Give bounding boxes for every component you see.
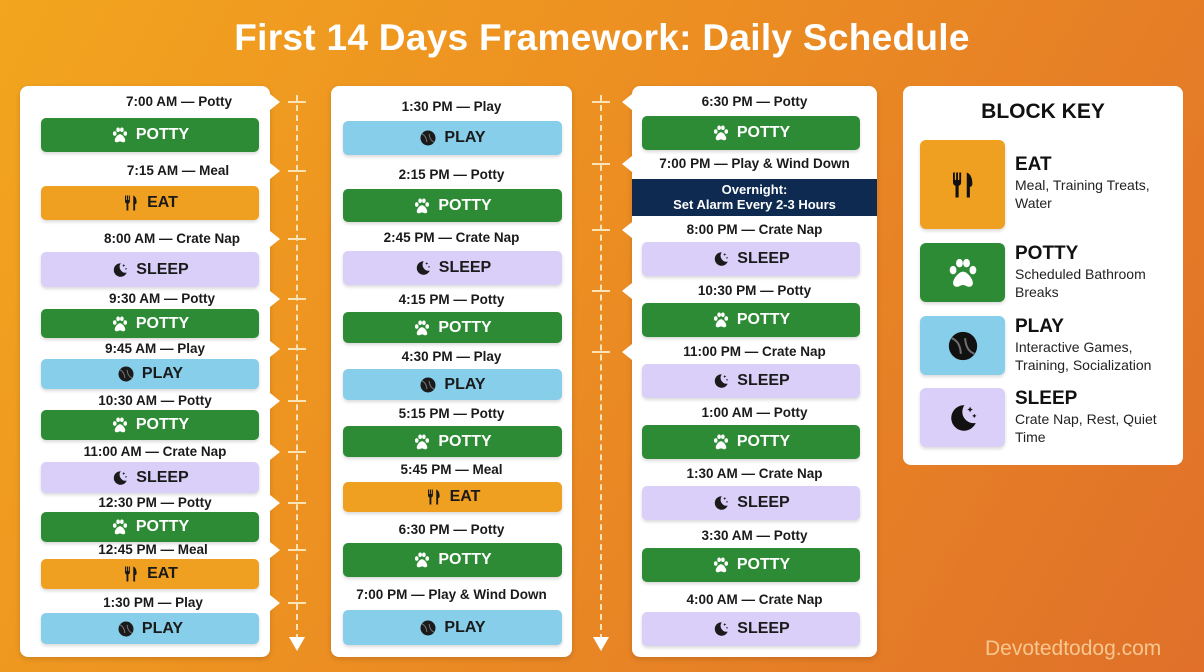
panel: column 3: POTTY <box>737 124 790 141</box>
panel: column 1: 9:30 AM — Potty <box>109 291 215 306</box>
panel: column 3: 1:30 AM — Crate Nap <box>686 466 823 481</box>
panel: column 2: 1:30 PM — Play <box>402 99 501 114</box>
panel: column 2: PLAY <box>444 376 486 392</box>
panel: block key: POTTY <box>1015 243 1078 264</box>
panel: column 2: 4:15 PM — Potty <box>399 292 504 307</box>
panel: block key: SLEEP <box>1015 388 1077 409</box>
panel: block key: Scheduled Bathroom <box>1015 266 1146 282</box>
panel: column 2: 4:30 PM — Play <box>402 349 501 364</box>
panel: column 2: 2:45 PM — Crate Nap <box>384 230 519 245</box>
panel: column 3: 4:00 AM — Crate Nap <box>686 592 823 607</box>
panel: column 3: 3:30 AM — Potty <box>701 528 808 543</box>
panel: block key: Water <box>1015 195 1052 211</box>
timeline 1 <box>288 95 306 651</box>
panel: block key: Meal, Training Treats, <box>1015 177 1150 193</box>
key: eat <box>920 140 1005 229</box>
panel: column 2: 5:45 PM — Meal <box>400 462 503 477</box>
panel: block key: Crate Nap, Rest, Quiet <box>1015 411 1157 427</box>
panel: column 2: 5:15 PM — Potty <box>399 406 504 421</box>
panel: column 1: POTTY <box>136 518 189 535</box>
panel: column 3: 7:00 PM — Play & Wind Down <box>659 156 850 171</box>
panel: column 2: EAT <box>450 488 480 505</box>
key: play <box>920 316 1005 375</box>
timeline 2 <box>592 95 610 651</box>
panel: column 3: SLEEP <box>737 250 790 267</box>
panel: column 3: POTTY <box>737 556 790 573</box>
panel: column 2: POTTY <box>438 196 492 214</box>
panel: column 1 <box>20 86 270 657</box>
callout: overnight: Set Alarm Every 2-3 Hours <box>673 197 836 212</box>
panel: column 2: POTTY <box>438 318 492 336</box>
panel: column 3: SLEEP <box>737 620 790 637</box>
panel: block key <box>903 86 1183 465</box>
panel: column 1: 8:00 AM — Crate Nap <box>104 231 240 246</box>
panel: column 1: 7:15 AM — Meal <box>127 163 229 178</box>
panel: column 1: PLAY <box>142 365 183 382</box>
panel: column 2: 2:15 PM — Potty <box>399 167 504 182</box>
footer: brand: Devotedtodog.com <box>985 637 1161 660</box>
panel: column 2: POTTY <box>438 432 492 450</box>
panel: column 2: POTTY <box>438 551 492 568</box>
panel: column 3: 10:30 PM — Potty <box>698 283 811 298</box>
panel: block key: BLOCK KEY <box>981 100 1105 123</box>
panel: column 1: 10:30 AM — Potty <box>98 393 212 408</box>
panel: column 3: SLEEP <box>737 372 790 389</box>
panel: column 1: 11:00 AM — Crate Nap <box>84 444 226 459</box>
panel: column 2: 7:00 PM — Play & Wind Down <box>356 587 547 602</box>
panel: column 1: POTTY <box>136 416 189 433</box>
panel: block key: Training, Socialization <box>1015 357 1151 373</box>
panel: column 2: 6:30 PM — Potty <box>399 522 504 537</box>
panel: column 1: 12:45 PM — Meal <box>98 542 208 557</box>
panel: column 1: SLEEP <box>136 260 189 278</box>
panel: column 1: SLEEP <box>136 468 189 486</box>
panel: column 3: SLEEP <box>737 494 790 511</box>
panel: column 1: PLAY <box>142 620 183 636</box>
panel: column 3 <box>632 86 877 657</box>
panel: column 1: 7:00 AM — Potty <box>126 94 232 109</box>
panel: column 3: 8:00 PM — Crate Nap <box>687 222 822 237</box>
panel: column 3: POTTY <box>737 311 790 328</box>
callout: overnight: Overnight: <box>722 182 787 197</box>
panel: column 2 <box>331 86 572 657</box>
panel: column 3: 6:30 PM — Potty <box>702 94 807 109</box>
panel: column 3: 1:00 AM — Potty <box>701 405 808 420</box>
panel: block key: Time <box>1015 429 1046 445</box>
panel: block key: EAT <box>1015 154 1052 175</box>
panel: column 1: 12:30 PM — Potty <box>98 495 212 510</box>
panel: column 1: 9:45 AM — Play <box>105 341 205 356</box>
panel: block key: Breaks <box>1015 284 1059 300</box>
panel: column 3: POTTY <box>737 433 790 450</box>
panel: column 2: SLEEP <box>439 259 491 276</box>
panel: column 3: 11:00 PM — Crate Nap <box>683 344 826 359</box>
callout: overnight <box>632 179 877 216</box>
panel: column 2: PLAY <box>444 618 486 636</box>
panel: column 1: POTTY <box>136 314 189 332</box>
key: potty <box>920 243 1005 302</box>
key: sleep <box>920 388 1005 447</box>
panel: column 2: PLAY <box>444 129 486 146</box>
panel: column 1: EAT <box>147 194 178 211</box>
panel: block key: Interactive Games, <box>1015 339 1132 355</box>
panel: block key: PLAY <box>1015 316 1064 337</box>
panel: column 1: 1:30 PM — Play <box>103 595 203 610</box>
panel: column 1: POTTY <box>136 126 189 143</box>
title: First 14 Days Framework: Daily Schedule <box>234 17 970 58</box>
panel: column 1: EAT <box>147 565 178 582</box>
